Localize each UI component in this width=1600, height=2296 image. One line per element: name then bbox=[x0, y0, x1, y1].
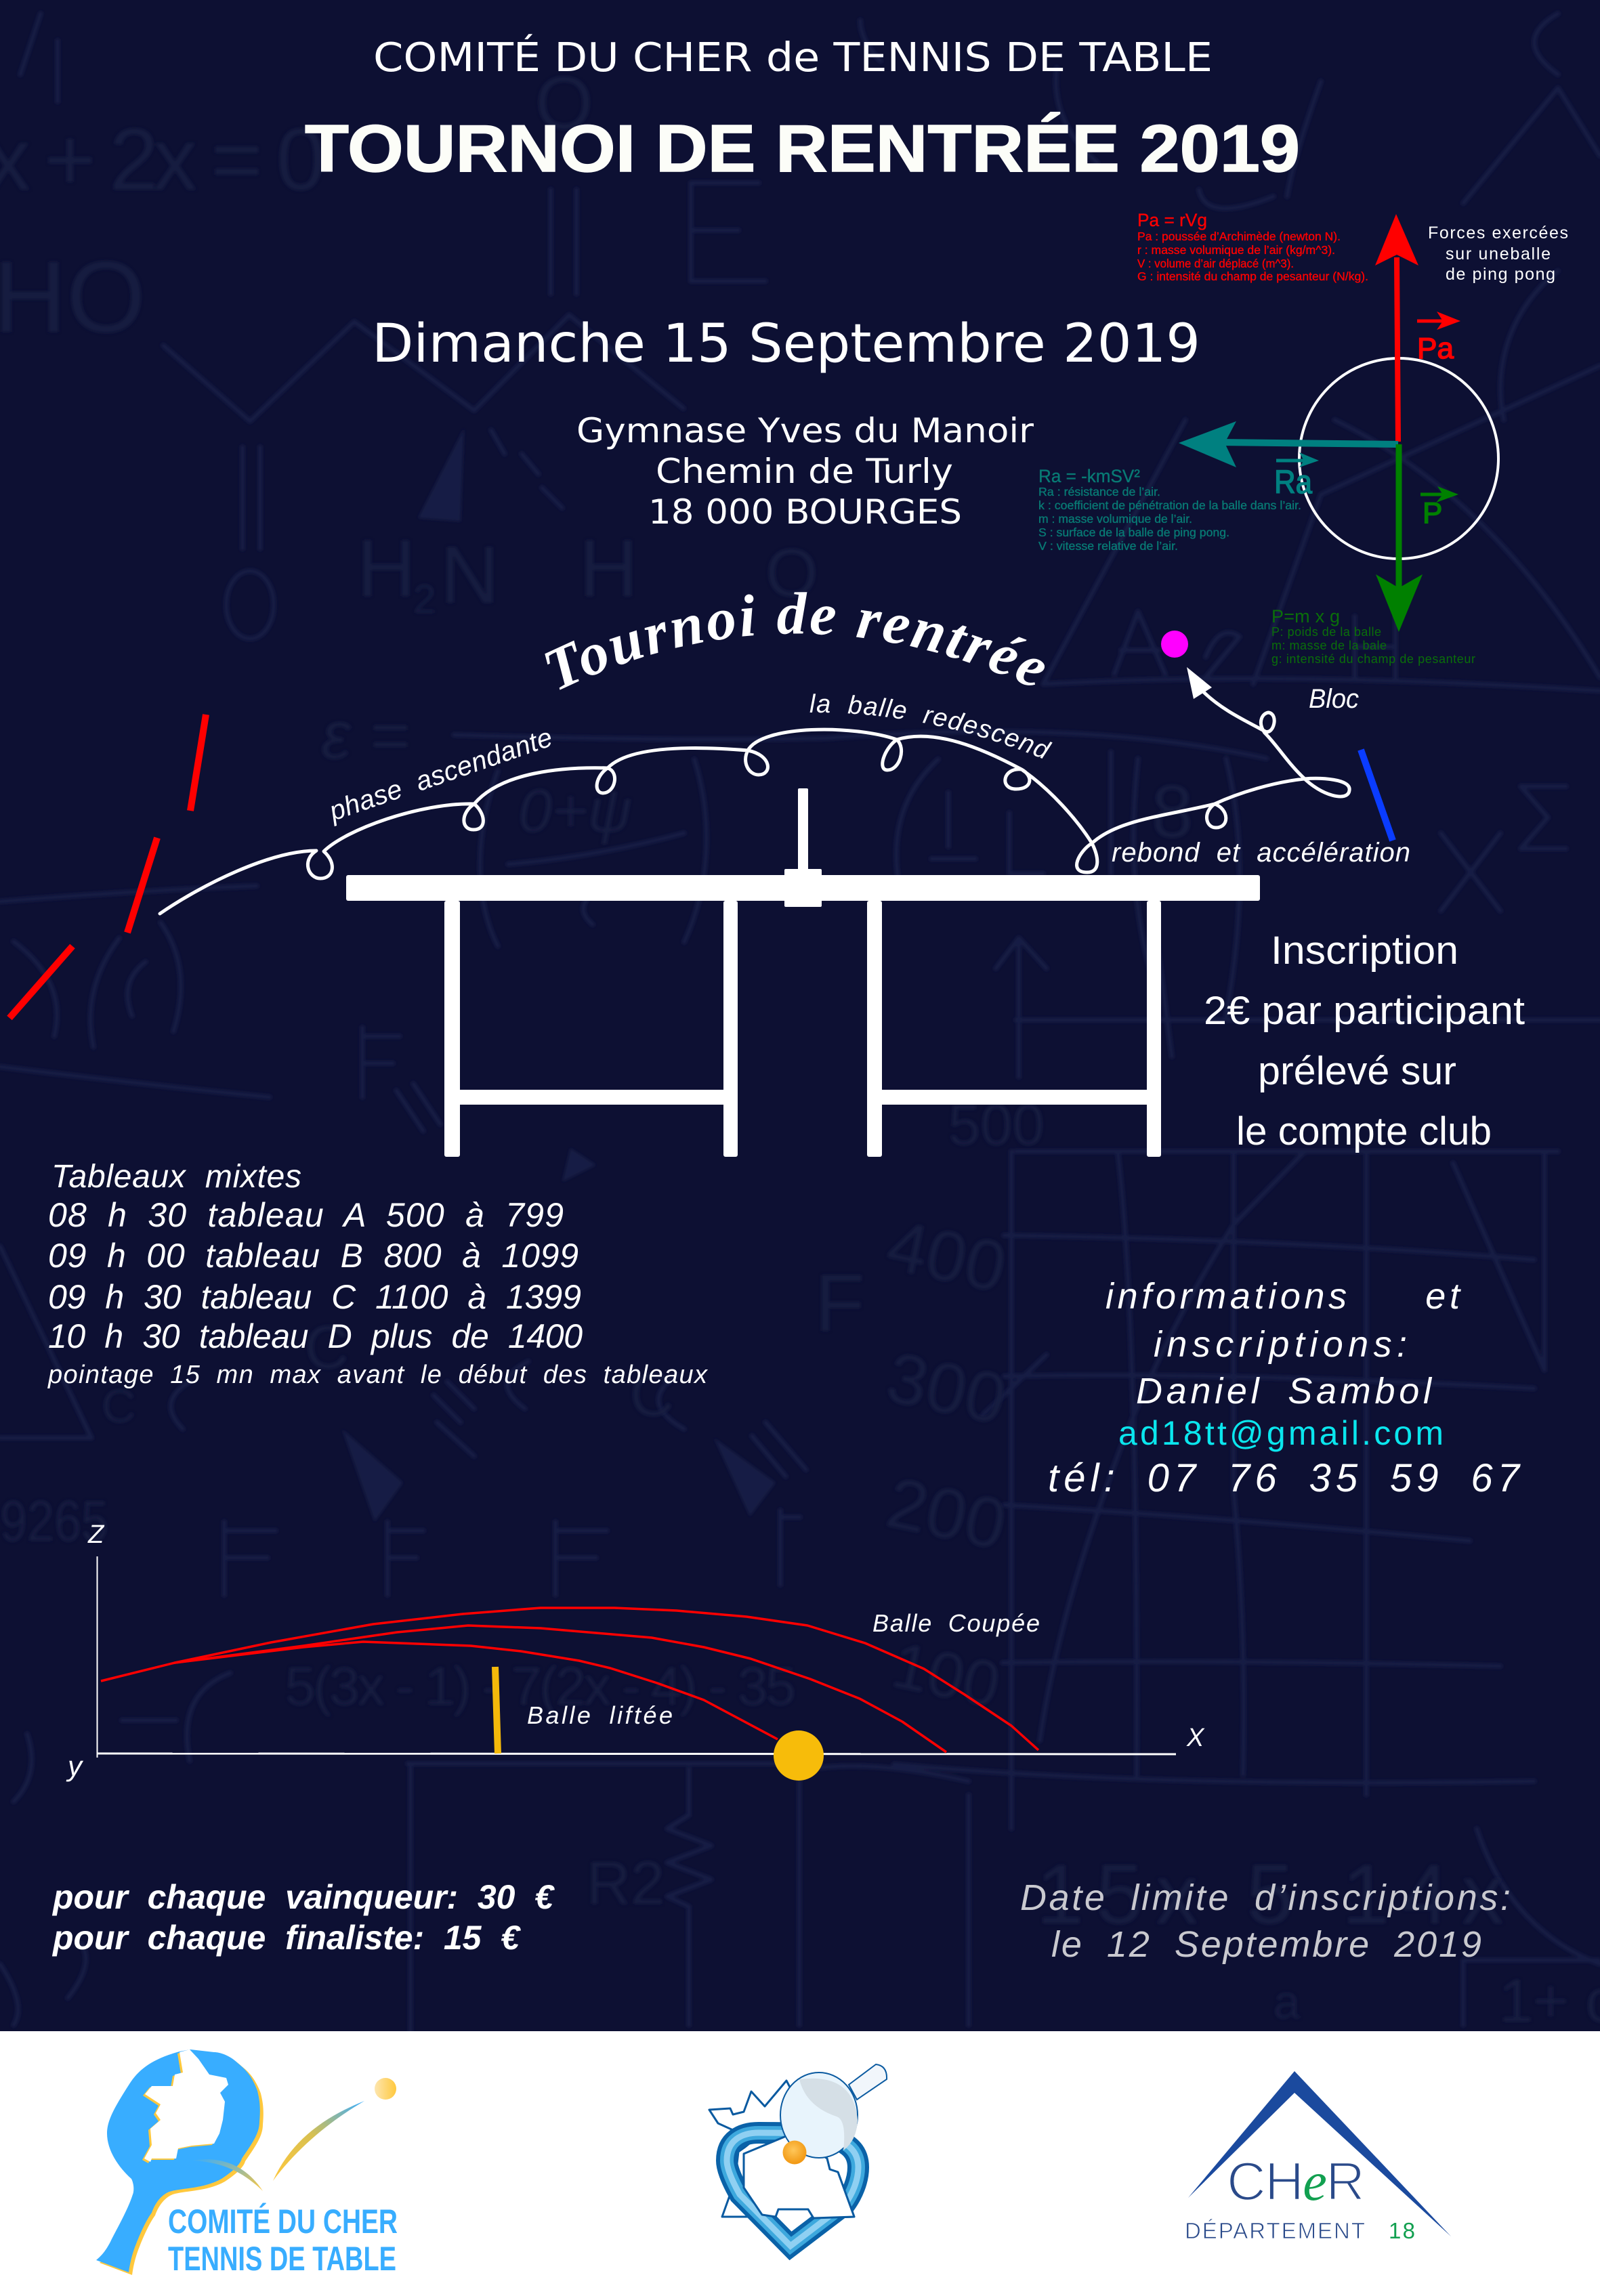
blue blocking racket bbox=[1361, 750, 1393, 841]
trajectory label: Bloc: Bloc bbox=[1309, 684, 1359, 714]
venue address bbox=[576, 411, 1034, 532]
label: Ra vector: Ra bbox=[1274, 465, 1312, 501]
background chalk formulas: 5(3x - 1) - 7(2x - 4) - 35 bbox=[285, 1656, 796, 1716]
formula: Archimedes thrust: G : intensité du champ de pesanteur (N/kg). bbox=[1137, 270, 1368, 283]
forces caption: sur uneballe bbox=[1446, 245, 1551, 263]
spin trajectory chart bbox=[66, 1521, 1205, 1782]
logo: pin and paddle bbox=[709, 2064, 887, 2246]
forces caption bbox=[1428, 224, 1568, 284]
schedule: tableaux mixtes: 09 h 30 tableau C 1100 à 1399 bbox=[48, 1278, 581, 1316]
formula: Archimedes thrust: Pa = rVg bbox=[1137, 210, 1207, 230]
paddle bbox=[96, 2049, 260, 2272]
formula: weight: m: masse de la bale bbox=[1271, 639, 1387, 652]
department map shadow bbox=[142, 2051, 226, 2163]
registration deadline bbox=[1020, 1877, 1511, 1965]
logo wordmark bbox=[168, 2203, 398, 2278]
prize money bbox=[51, 1878, 555, 1957]
background chalk formulas: C bbox=[305, 1314, 349, 1382]
trajectory label: rebond et accélération: rebond et accélération bbox=[1112, 838, 1410, 868]
background chalk formulas: a bbox=[1273, 1976, 1300, 2028]
net clamp bbox=[784, 869, 822, 907]
title: TOURNOI DE RENTRÉE 2019 bbox=[305, 111, 1300, 186]
logo: Cher département 18 bbox=[1185, 2071, 1451, 2243]
paddle rubber bbox=[799, 2079, 858, 2150]
registration deadline: le 12 Septembre 2019 bbox=[1051, 1924, 1481, 1965]
venue address: Gymnase Yves du Manoir bbox=[576, 411, 1034, 450]
paddle handle bbox=[849, 2064, 887, 2100]
formula: weight: g: intensité du champ de pesanteur bbox=[1271, 652, 1475, 666]
schedule: tableaux mixtes: 08 h 30 tableau A 500 à 799 bbox=[48, 1196, 564, 1234]
formula: Archimedes thrust: V : volume d’air déplacé (m^3). bbox=[1137, 257, 1294, 270]
registration fee: le compte club bbox=[1236, 1109, 1492, 1153]
department line: DÉPARTEMENT bbox=[1185, 2218, 1365, 2243]
formula: air resistance: m : masse volumique de l’air. bbox=[1038, 512, 1192, 526]
net post bbox=[495, 1667, 498, 1753]
axis labels: y bbox=[66, 1750, 84, 1782]
contact information bbox=[1048, 1276, 1521, 1500]
magenta ball bbox=[1161, 631, 1188, 658]
paddle head bbox=[780, 2072, 858, 2158]
arrow: weight bbox=[1376, 444, 1423, 632]
background chalk formulas: 0+ψ bbox=[518, 778, 632, 845]
schedule: tableaux mixtes: Tableaux mixtes bbox=[51, 1159, 301, 1195]
background chalk formulas: 400 bbox=[881, 1206, 1013, 1308]
department map bbox=[144, 2049, 228, 2162]
CHER wordmark: CHeR bbox=[1227, 2151, 1365, 2212]
registration fee: Inscription bbox=[1271, 929, 1458, 973]
footer band bbox=[0, 2031, 1600, 2296]
ping pong table bbox=[346, 788, 1260, 1157]
label: Pa vector: Pa bbox=[1417, 332, 1454, 365]
arrowhead bbox=[1187, 667, 1212, 699]
schedule: tableaux mixtes: 09 h 00 tableau B 800 à 1099 bbox=[48, 1237, 578, 1275]
ball swoosh bbox=[273, 2101, 364, 2181]
formula: weight bbox=[1271, 606, 1475, 666]
logo wordmark: TENNIS DE TABLE bbox=[168, 2240, 396, 2278]
contact information: informations et bbox=[1106, 1276, 1461, 1317]
background chalk formulas: N bbox=[440, 530, 499, 620]
roof triangle bbox=[1188, 2071, 1451, 2236]
topspin and backspin curves bbox=[101, 1608, 1038, 1752]
curve label: Balle liftée: Balle liftée bbox=[527, 1701, 673, 1729]
forces caption: de ping pong bbox=[1446, 265, 1555, 284]
axis labels bbox=[66, 1521, 1205, 1782]
formula: air resistance: Ra = -kmSV² bbox=[1038, 466, 1140, 486]
label: P vector: P bbox=[1423, 496, 1442, 530]
background chalk formulas: 8 bbox=[1152, 770, 1193, 853]
contact information: tél: 07 76 35 59 67 bbox=[1048, 1456, 1521, 1500]
contact information: ad18tt@gmail.com bbox=[1118, 1414, 1444, 1452]
contact information: Daniel Sambol bbox=[1136, 1371, 1433, 1411]
background chalk formulas: O bbox=[765, 535, 818, 611]
trajectory label: la balle redescend: la balle redescend bbox=[810, 694, 1053, 759]
ball bbox=[375, 2078, 396, 2100]
background chalk formulas: 200 bbox=[881, 1463, 1013, 1565]
formula: air resistance: Ra : résistance de l’air. bbox=[1038, 485, 1160, 498]
registration fee: 2€ par participant bbox=[1204, 989, 1525, 1033]
label: P vector bbox=[1420, 486, 1458, 530]
venue address: Chemin de Turly bbox=[656, 452, 953, 491]
formula: air resistance: S : surface de la balle de ping pong. bbox=[1038, 526, 1229, 539]
ball circle bbox=[1299, 358, 1498, 559]
curved heading: Tournoi de rentrée: Tournoi de rentrée bbox=[545, 592, 1045, 690]
formula: Archimedes thrust bbox=[1137, 210, 1368, 283]
trajectory label: phase ascendante: phase ascendante bbox=[325, 723, 556, 827]
curve label: Balle Coupée: Balle Coupée bbox=[872, 1609, 1040, 1637]
schedule: tableaux mixtes: 10 h 30 tableau D plus de 1400 bbox=[48, 1317, 583, 1355]
red racket strokes bbox=[9, 715, 206, 1018]
formula: weight: P=m x g bbox=[1271, 606, 1340, 626]
label: Pa vector bbox=[1417, 312, 1460, 365]
prize money: pour chaque vainqueur: 30 € bbox=[51, 1878, 555, 1916]
prize money: pour chaque finaliste: 15 € bbox=[51, 1919, 521, 1957]
registration fee: prélevé sur bbox=[1258, 1049, 1456, 1093]
background chalk formulas: 500 bbox=[948, 1093, 1045, 1157]
formula: air resistance: V : vitesse relative de l’air. bbox=[1038, 539, 1178, 553]
france lower right overlay bbox=[744, 2133, 854, 2218]
background chalk formulas: 9265 bbox=[0, 1489, 108, 1554]
registration deadline: Date limite d’inscriptions: bbox=[1020, 1877, 1511, 1918]
formula: air resistance: k : coefficient de pénétration de la balle dans l’air. bbox=[1038, 498, 1301, 512]
background chalk formulas: 2 bbox=[413, 576, 436, 622]
background chalk formulas: 15x 5 14x bbox=[1036, 1848, 1504, 1942]
department number: 18 bbox=[1389, 2218, 1415, 2243]
net post bbox=[798, 788, 808, 871]
formula: Archimedes thrust: r : masse volumique de l’air (kg/m^3). bbox=[1137, 243, 1335, 257]
forces caption: Forces exercées bbox=[1428, 224, 1568, 242]
forces diagram bbox=[1179, 214, 1498, 632]
background chalk formulas: 100 bbox=[886, 1629, 1006, 1722]
background chalk formulas: 300 bbox=[881, 1338, 1013, 1440]
formula: Archimedes thrust: Pa : poussée d’Archimède (newton N). bbox=[1137, 230, 1341, 243]
axis labels: Z bbox=[87, 1521, 105, 1549]
logo: Comité du Cher bbox=[96, 2049, 398, 2278]
arrow: Archimedes thrust bbox=[1375, 214, 1418, 442]
paddle shadow bbox=[100, 2052, 264, 2275]
axis labels: X bbox=[1186, 1724, 1205, 1752]
formula: weight: P: poids de la balle bbox=[1271, 625, 1381, 639]
contact information: inscriptions: bbox=[1154, 1324, 1407, 1365]
axis Z bbox=[96, 1556, 98, 1758]
background chalk formulas: R2 bbox=[587, 1850, 665, 1917]
venue address: 18 000 BOURGES bbox=[648, 492, 962, 532]
date: Dimanche 15 Septembre 2019 bbox=[372, 314, 1200, 375]
background chalk formulas: F bbox=[815, 1258, 864, 1348]
formula: air resistance bbox=[1038, 466, 1301, 553]
background chalk formulas: ε = bbox=[321, 698, 409, 773]
axis X bbox=[97, 1753, 1176, 1754]
orange ball bbox=[783, 2140, 806, 2165]
arrow: air resistance bbox=[1179, 421, 1398, 467]
background chalk formulas: H bbox=[579, 523, 638, 614]
pin rings bbox=[727, 2133, 858, 2246]
schedule: tableaux mixtes bbox=[47, 1159, 709, 1389]
registration fee bbox=[1204, 929, 1525, 1153]
background chalk formulas: O bbox=[535, 62, 593, 145]
background chalk formulas: C bbox=[630, 1361, 674, 1429]
schedule: tableaux mixtes: pointage 15 mn max avant le début des tableaux bbox=[47, 1361, 709, 1389]
background chalk formulas: C bbox=[102, 1380, 136, 1432]
label: Ra vector bbox=[1274, 452, 1319, 501]
header: committee name: COMITÉ DU CHER de TENNIS DE TABLE bbox=[373, 34, 1213, 81]
yellow ball bbox=[774, 1730, 824, 1781]
background chalk formulas: H bbox=[357, 523, 416, 614]
logo wordmark: COMITÉ DU CHER bbox=[168, 2203, 398, 2240]
france outline bbox=[709, 2081, 854, 2218]
paddle swoosh bbox=[192, 2159, 263, 2191]
ball trajectory with spin loops bbox=[160, 667, 1349, 914]
